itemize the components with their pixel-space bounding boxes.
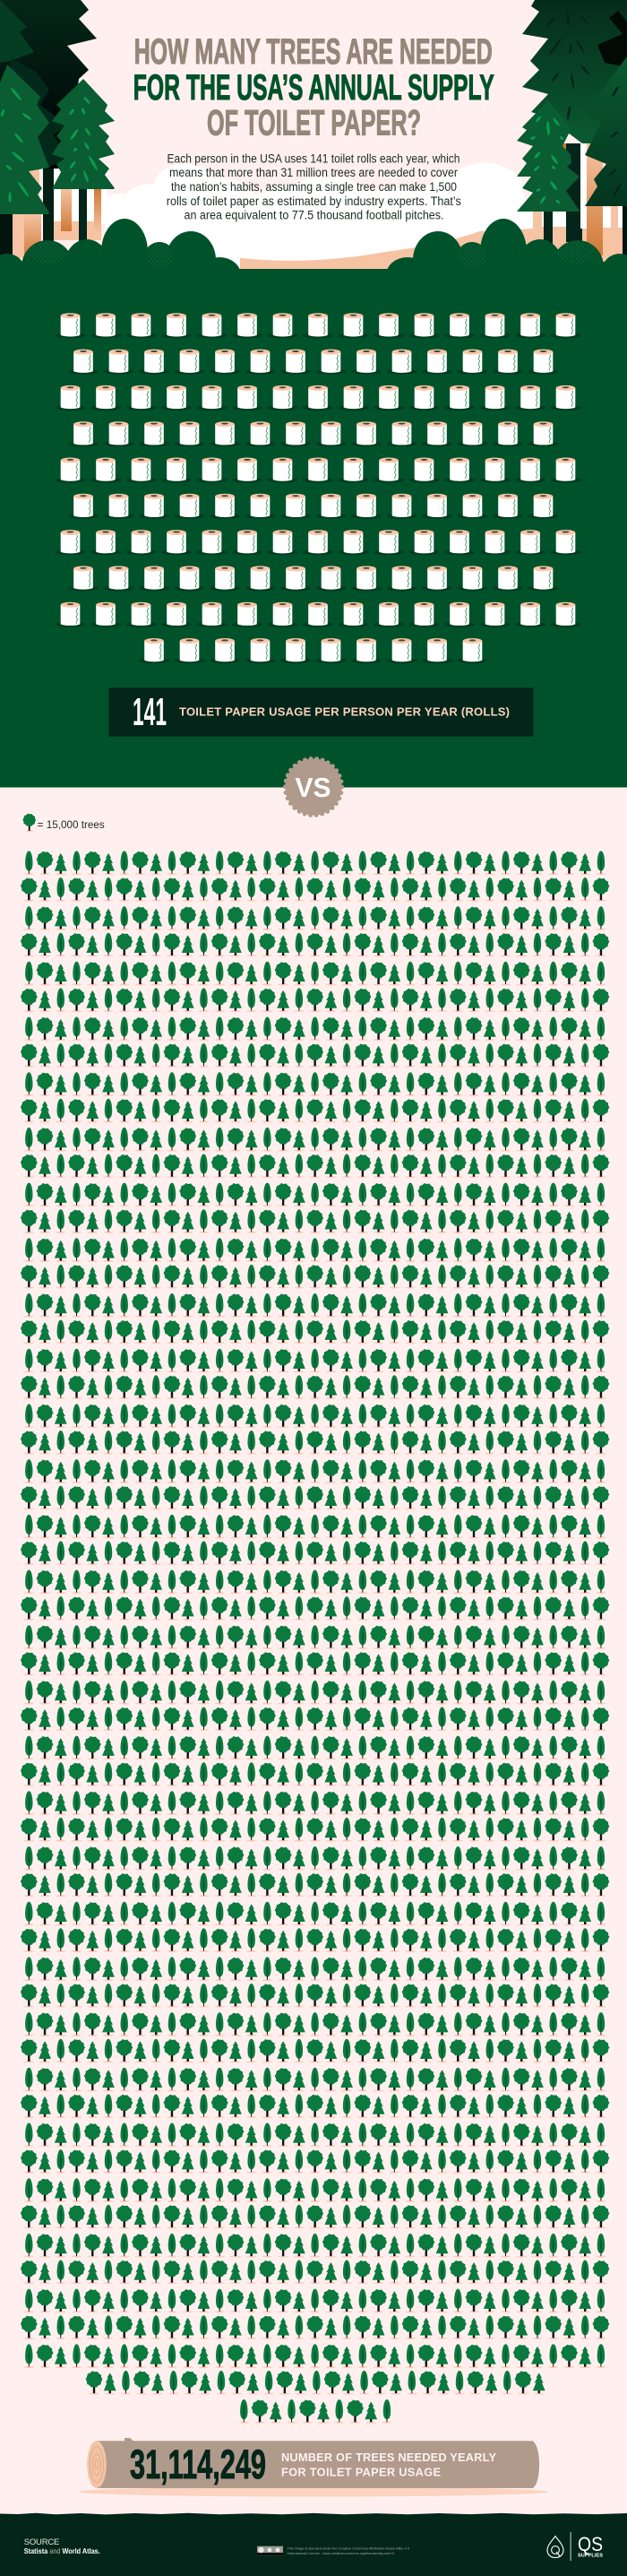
log with total tree count: 31,114,249 [130,2442,266,2487]
callout: 141 rolls per person: TOILET PAPER USAGE PER PERSON PER YEAR (ROLLS) [179,705,510,719]
licence text [287,2546,409,2555]
intro text: the nation’s habits, assuming a single tree can make 1,500 [171,180,457,194]
VS badge [285,758,342,816]
right side tree [585,56,627,206]
left trunks [0,167,107,258]
left second tree [52,79,115,189]
tree pictogram: 2,074 trees [21,851,609,2424]
licence text: International License - www.creativecommons.org/licenses/by-sa/4.0 [287,2552,394,2555]
footer [0,2513,627,2576]
QS Supplies logo: SUPPLIES [578,2553,603,2558]
title: OF TOILET PAPER? [207,104,421,143]
intro text: means that more than 31 million trees are needed to cover [169,166,458,179]
intro text: rolls of toilet paper as estimated by industry experts. That’s [167,194,461,208]
source: SOURCE [24,2537,59,2547]
right main dark tree [522,0,627,143]
intro text: an area equivalent to 77.5 thousand football pitches. [185,208,444,222]
title [133,32,494,143]
callout: 141 rolls per person: 141 [133,690,167,734]
intro text [167,152,461,222]
white cloud [106,162,537,269]
left front tree [0,65,49,214]
legend: one tree equals 15,000 trees: = 15,000 trees [38,820,105,831]
right trunks [517,143,627,260]
callout: 141 rolls per person [108,687,534,737]
toilet roll pictogram: 141 rolls [56,313,580,663]
intro text: Each person in the USA uses 141 toilet rolls each year, which [167,152,460,165]
QS Supplies logo [547,2532,603,2561]
right back black tree [597,11,627,67]
licence badge [257,2546,283,2555]
log with total tree count: NUMBER OF TREES NEEDED YEARLY [281,2451,496,2464]
log with total tree count [79,2438,548,2497]
left back trees [0,0,97,169]
VS badge: VS [296,772,331,803]
dark green section with bushes [0,219,627,787]
left bushes [0,219,241,297]
right bushes [386,219,627,297]
right front tree [517,100,580,212]
header forest scene [0,0,627,269]
source [24,2537,100,2555]
peach ground [240,224,627,269]
QS Supplies logo: QS [578,2533,603,2555]
legend: one tree equals 15,000 trees [23,814,105,832]
log with total tree count: FOR TOILET PAPER USAGE [281,2465,441,2478]
licence text: This image is licensed under the Creative Commons Attribution-Share Alike 4.0 [287,2546,409,2550]
source: Statista and World Atlas. [24,2546,100,2555]
